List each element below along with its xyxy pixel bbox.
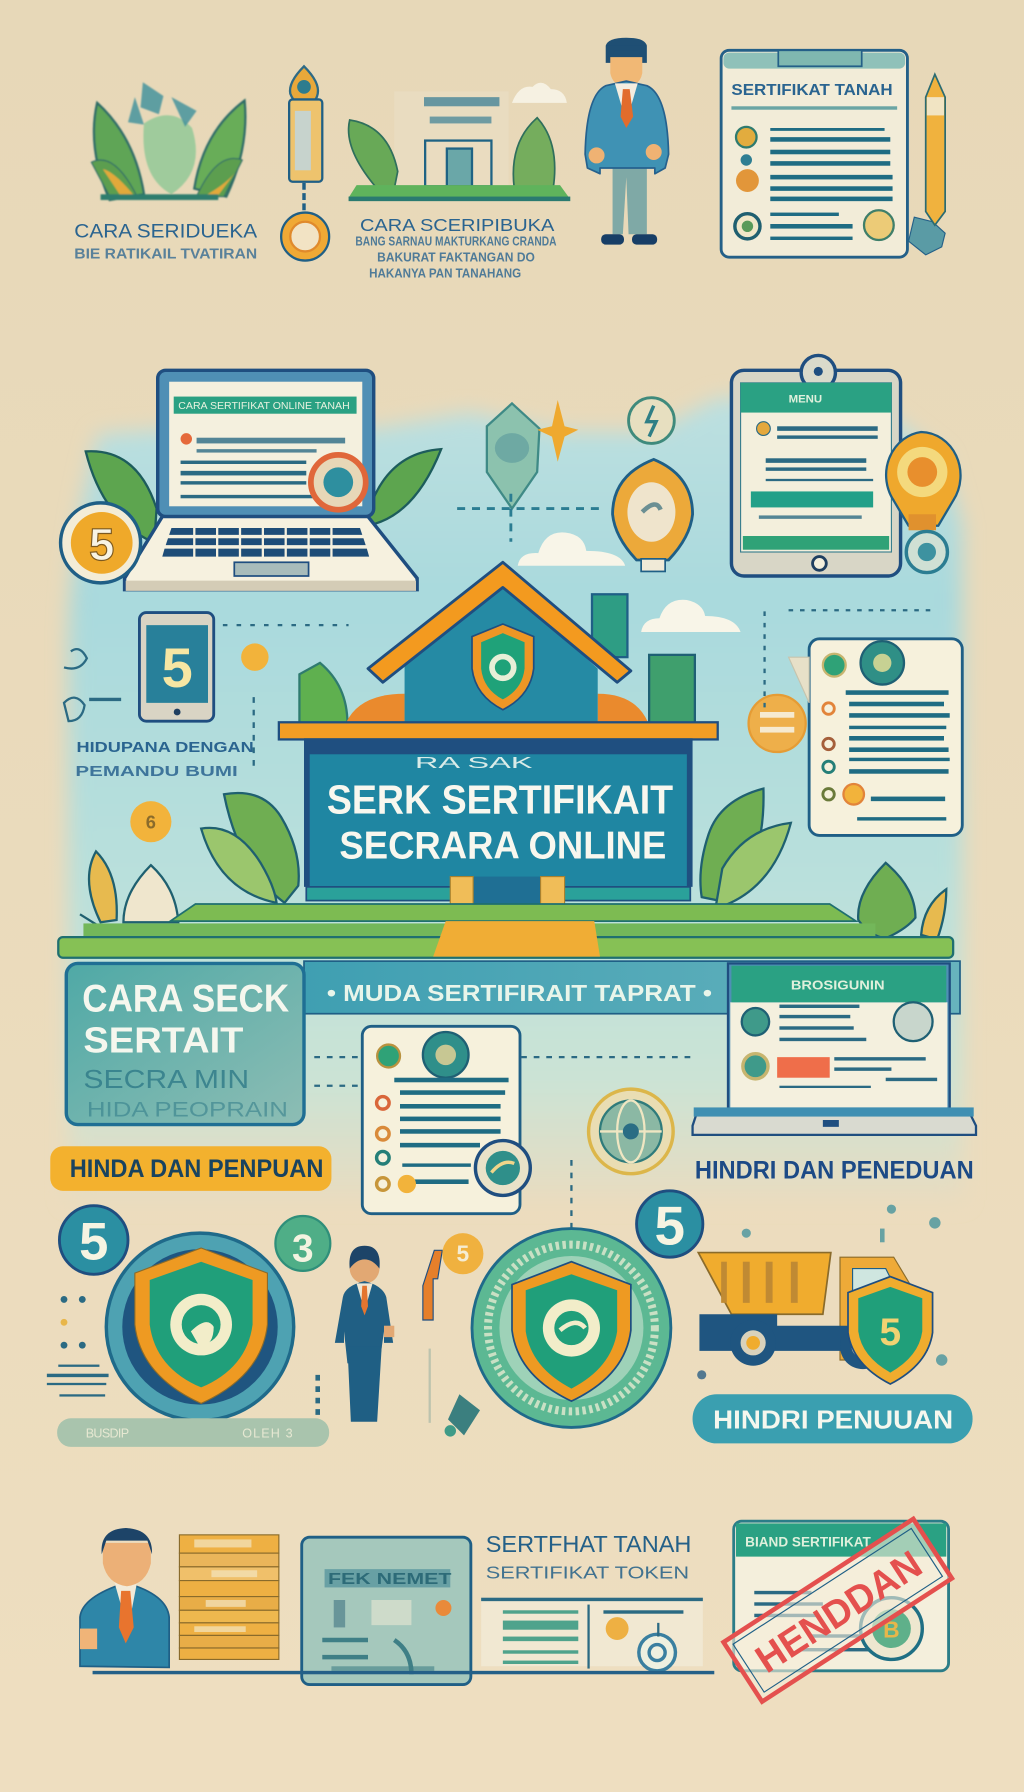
left caption: HIDUPANA DENGAN [77, 740, 254, 756]
bottom row: map panel [302, 1537, 471, 1685]
center: smartphone number 5 [139, 613, 214, 721]
badge: number 5 gold: 5 [89, 519, 114, 570]
bottom row: document layout [481, 1598, 703, 1671]
bottom row: baseline [93, 1671, 714, 1674]
bottom row: rejected document: BIAND SERTIFIKAT [745, 1534, 871, 1549]
title text [327, 755, 673, 867]
top row: caption [74, 221, 257, 262]
center: shield icon with star [487, 400, 578, 509]
left info card: SECRA MIN [83, 1064, 249, 1094]
center: gold lightbulb and coin [886, 432, 961, 573]
chimney [592, 594, 627, 657]
center: clouds [518, 532, 741, 632]
center: tablet [731, 355, 901, 576]
main panel door [450, 877, 565, 920]
top row: certificate document [721, 50, 945, 257]
badge: teal 5 right [637, 1191, 703, 1257]
teal pill label [693, 1394, 973, 1443]
badge: green 3 [275, 1216, 330, 1271]
bottom row: rejected document [734, 1521, 949, 1671]
left info card: HIDA PEOPRAIN [87, 1097, 288, 1122]
left dotted connector and small icons [64, 625, 349, 766]
top row: caption: BIE RATIKAIL TVATIRAN [74, 246, 257, 262]
center: coin icon [629, 398, 674, 443]
top row: pencil [926, 74, 945, 225]
top row: building caption [355, 215, 557, 281]
bottom row: heading text: SERTFHAT TANAH [486, 1531, 691, 1557]
left info card: CARA SECK [82, 977, 289, 1020]
heading: hindari dan penipuan: HINDRI DAN PENEDUAN [695, 1156, 974, 1184]
badge: green 3: 3 [292, 1228, 314, 1271]
top row: pendant icon [281, 66, 329, 261]
left gold dot with 6 [130, 801, 171, 842]
band: subtitle ribbon: • MUDA SERTIFIRAIT TAPRAT • [327, 980, 712, 1006]
tool and gold 5 badge: 5 [456, 1241, 469, 1267]
house body [405, 583, 598, 722]
right gold coin [749, 695, 806, 752]
title text: SECRARA ONLINE [339, 824, 666, 867]
roof [368, 562, 631, 682]
right laptop [693, 963, 976, 1135]
light blue backdrop [69, 398, 962, 1200]
center: laptop [86, 370, 441, 591]
house shield [472, 624, 534, 710]
large green shield seal [472, 1229, 671, 1427]
center: tablet: MENU [789, 393, 822, 405]
center: dashed connector [457, 494, 603, 542]
yellow pill label: HINDA DAN PENPUAN [70, 1155, 323, 1183]
left caption: PEMANDU BUMI [75, 764, 238, 780]
dump truck with shield [698, 1253, 933, 1384]
top row: building caption: BANG SARNAU MAKTURKANG CRANDA [355, 235, 557, 249]
left info card: SERTAIT [83, 1020, 243, 1061]
top row: building caption: CARA SCERIPIBUKA [360, 215, 555, 235]
top row: standing man [585, 38, 669, 245]
bottom row: heading text: SERTIFIKAT TOKEN [486, 1562, 689, 1582]
bottom row: heading text [486, 1531, 691, 1582]
large blue shield medal [106, 1233, 294, 1421]
center: smartphone number 5: 5 [162, 636, 193, 699]
bottom row: official man [80, 1528, 169, 1667]
grey pill label [57, 1418, 329, 1447]
right document panel [789, 639, 962, 835]
badge: teal 5 right: 5 [654, 1195, 685, 1257]
top row: building caption: BAKURAT FAKTANGAN DO [377, 251, 535, 265]
left info card [66, 963, 304, 1125]
left foliage [80, 793, 299, 943]
globe emblem [589, 1089, 673, 1174]
top row: plant emblem [91, 82, 245, 200]
yellow pill label [50, 1146, 331, 1191]
grey pill label: OLEH 3 [242, 1427, 293, 1441]
top row: building [349, 83, 570, 201]
top row: caption: CARA SERIDUEKA [74, 221, 257, 243]
main house [279, 562, 718, 739]
badge: teal 5 [59, 1206, 128, 1274]
right small scatter [697, 1205, 947, 1379]
right dashed connector [765, 610, 937, 714]
main title panel [304, 738, 693, 901]
right foliage [700, 789, 946, 939]
tool and gold 5 badge [423, 1233, 483, 1437]
suited man [335, 1246, 394, 1422]
bottom row: coin stack [179, 1535, 279, 1659]
title text: SERK SERTIFIKAIT [327, 777, 673, 823]
left caption [75, 740, 254, 780]
top row: certificate document: SERTIFIKAT TANAH [731, 82, 893, 99]
center: laptop: CARA SERTIFIKAT ONLINE TANAH [178, 401, 350, 412]
top row: building caption: HAKANYA PAN TANAHANG [369, 267, 521, 281]
bottom row: red stamp [724, 1519, 952, 1702]
middle document panel [362, 1026, 530, 1214]
dashed connectors [314, 1057, 693, 1229]
bottom row: rejected document: B [883, 1617, 900, 1643]
center: bulb [613, 459, 693, 571]
laptop leaves [86, 449, 441, 543]
bottom row: red stamp: HENDDAN [748, 1543, 930, 1682]
orange shelf [279, 722, 718, 739]
dump truck with shield: 5 [879, 1311, 901, 1354]
right laptop: BROSIGUNIN [791, 979, 885, 993]
bottom row: map panel: FEK NEMET [328, 1571, 452, 1588]
badge: teal 5: 5 [79, 1212, 108, 1271]
grey pill label: BUSDIP [86, 1427, 129, 1441]
left dots and lines [47, 1296, 318, 1421]
title text: RA SAK [415, 755, 533, 772]
ground: green layers [58, 904, 953, 958]
teal pill label: HINDRI PENUUAN [713, 1405, 953, 1435]
left small gold coin [241, 643, 269, 671]
badge: number 5 gold [61, 503, 141, 583]
side plants on shelf [299, 663, 347, 723]
band: subtitle ribbon [304, 961, 960, 1014]
left gold dot with 6: 6 [146, 812, 156, 833]
